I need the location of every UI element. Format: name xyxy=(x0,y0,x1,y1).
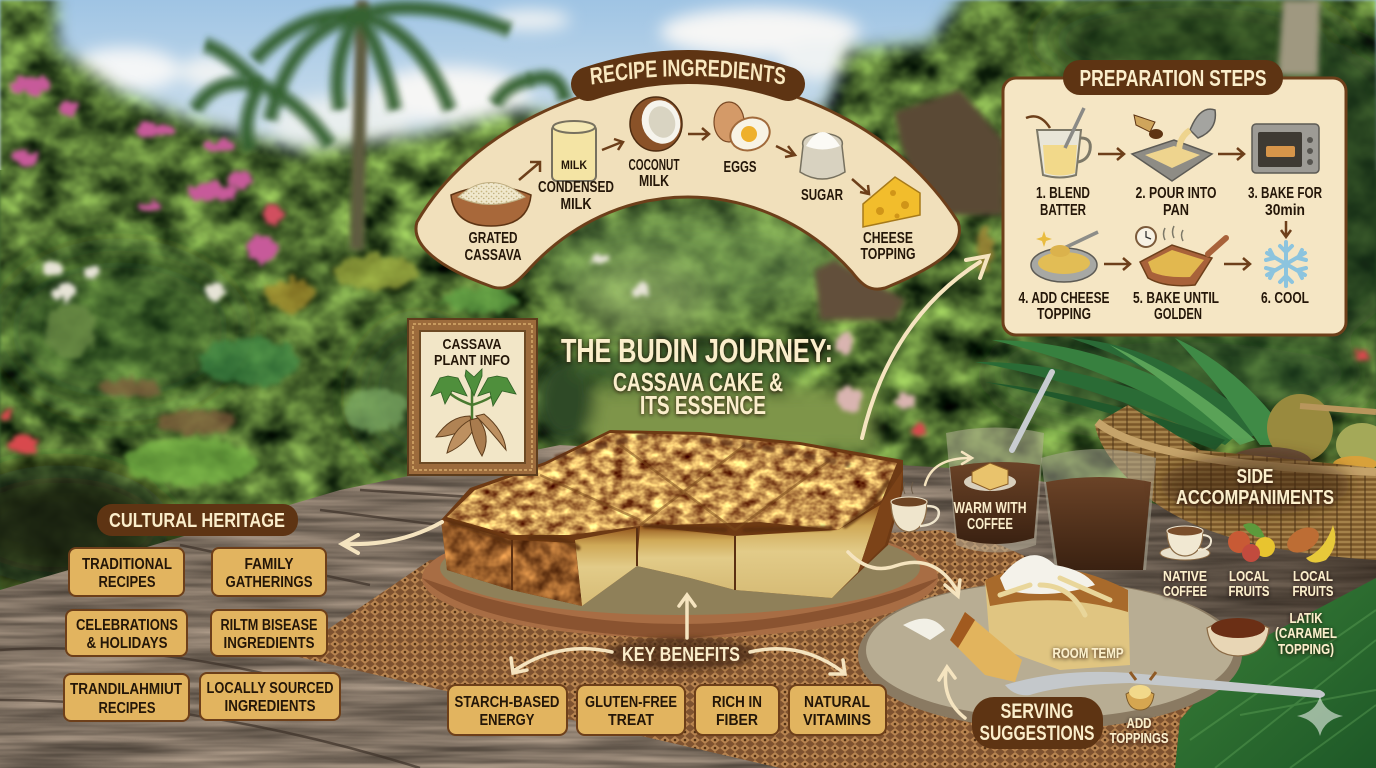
heading pill xyxy=(1063,60,1283,95)
heading: SIDE xyxy=(1236,466,1274,488)
local fruits two xyxy=(1283,522,1335,600)
ingredient: sugar: SUGAR xyxy=(801,187,843,204)
warm with coffee serving: COFFEE xyxy=(967,516,1013,533)
latik topping: TOPPING) xyxy=(1278,641,1334,658)
tag: rich disease ingredients xyxy=(211,610,327,656)
serving suggestions section xyxy=(939,667,1168,749)
arrow to slice xyxy=(939,667,965,718)
native coffee xyxy=(1160,526,1211,600)
tag: traditional recipes variant xyxy=(64,674,189,721)
panel box xyxy=(1003,78,1346,335)
tag: family gatherings: FAMILY xyxy=(244,556,294,573)
arrow xyxy=(1104,258,1130,270)
tag: locally sourced ingredients: INGREDIENTS xyxy=(224,698,316,715)
arrow xyxy=(519,162,540,180)
woven placemat xyxy=(290,530,1260,768)
main title: CASSAVA CAKE & xyxy=(613,367,783,397)
local fruits two: LOCAL xyxy=(1293,568,1333,585)
arrow xyxy=(1281,221,1291,237)
tag: rich in fiber: RICH IN xyxy=(712,694,762,711)
step 2 xyxy=(1132,109,1216,219)
step 4 xyxy=(1018,231,1110,323)
heading pill: SERVING xyxy=(1000,700,1074,723)
step 3: oven xyxy=(1248,124,1322,219)
tag: gluten-free treat xyxy=(577,685,685,735)
tag: gluten-free treat: TREAT xyxy=(608,712,654,729)
latik topping xyxy=(1207,610,1337,658)
second plate with cake slice xyxy=(858,555,1325,729)
arrow xyxy=(925,452,972,485)
latik topping: (CARAMEL xyxy=(1275,625,1337,642)
tag: traditional recipes variant: TRANDILAHMIUT xyxy=(70,681,182,698)
native coffee: NATIVE xyxy=(1163,568,1207,585)
bamboo basket with fruits xyxy=(1095,394,1376,560)
arrows from benefits heading xyxy=(511,595,845,674)
main title: ITS ESSENCE xyxy=(640,390,766,420)
step 2: PAN xyxy=(1163,202,1189,219)
local fruits one xyxy=(1228,523,1275,600)
step 3: oven: 30min xyxy=(1265,202,1305,219)
arrow: cake to serving plate xyxy=(848,552,960,596)
ingredient: grated cassava: GRATED xyxy=(468,230,518,247)
step 4: TOPPING xyxy=(1037,306,1091,323)
ingredient: grated cassava: CASSAVA xyxy=(464,247,522,264)
local fruits one: LOCAL xyxy=(1229,568,1269,585)
tag: starch-based energy: STARCH-BASED xyxy=(454,694,560,711)
icon: coffee cup xyxy=(891,482,939,532)
latik topping: LATIK xyxy=(1290,610,1323,627)
background: garden scene xyxy=(0,0,1376,590)
arrow xyxy=(776,146,795,157)
arrow xyxy=(688,128,709,140)
tag: rich disease ingredients: INGREDIENTS xyxy=(224,635,315,652)
cassava plant info frame: CASSAVA xyxy=(442,336,502,353)
tag: natural vitamins: VITAMINS xyxy=(803,712,871,729)
side accompaniments section xyxy=(1160,455,1350,658)
ingredient: cheese: TOPPING xyxy=(860,246,916,263)
step 1: 1. BLEND xyxy=(1036,185,1090,202)
room temp label: ROOM TEMP xyxy=(1052,645,1124,662)
ingredient: condensed milk: MILK xyxy=(561,158,587,172)
tag: rich disease ingredients: RILTM BISEASE xyxy=(220,617,318,634)
watermark sparkle xyxy=(1297,696,1343,736)
step 3: oven: 3. BAKE FOR xyxy=(1248,185,1322,202)
tag: starch-based energy: ENERGY xyxy=(480,712,535,729)
heading pill xyxy=(571,50,805,101)
native coffee: COFFEE xyxy=(1163,583,1207,600)
tag: celebrations and holidays xyxy=(66,610,187,656)
step 6: snowflake: 6. COOL xyxy=(1261,290,1309,307)
heading xyxy=(1160,455,1350,515)
ingredient: cheese: CHEESE xyxy=(863,230,913,247)
coffee glass left xyxy=(946,372,1052,552)
heading pill xyxy=(972,697,1103,749)
tag: traditional recipes xyxy=(69,548,184,596)
add toppings xyxy=(1110,672,1168,747)
local fruits two: FRUITS xyxy=(1292,583,1334,600)
tag: natural vitamins: NATURAL xyxy=(804,694,870,711)
arrow to heritage xyxy=(342,522,442,553)
arrow: to preparation steps xyxy=(862,256,988,438)
main plate xyxy=(422,518,938,639)
wooden table xyxy=(0,445,1376,768)
ingredient: condensed milk xyxy=(538,121,614,213)
banana leaf xyxy=(1175,578,1376,768)
tag: locally sourced ingredients xyxy=(200,673,340,720)
ingredient: cheese xyxy=(860,177,920,263)
tag: celebrations and holidays: CELEBRATIONS xyxy=(76,617,178,634)
ingredient: sugar xyxy=(800,132,845,204)
ingredient: coconut xyxy=(628,95,686,190)
add toppings: ADD xyxy=(1126,715,1152,732)
heading pill: RECIPE INGREDIENTS xyxy=(590,59,786,84)
step 6: snowflake xyxy=(1261,242,1309,307)
step 2: 2. POUR INTO xyxy=(1136,185,1216,202)
tag: celebrations and holidays: & HOLIDAYS xyxy=(86,635,168,652)
tag: family gatherings xyxy=(212,548,326,596)
ingredient: coconut: MILK xyxy=(639,173,669,190)
tag: locally sourced ingredients: LOCALLY SOURCED xyxy=(206,680,334,697)
step 4: 4. ADD CHEESE xyxy=(1018,290,1110,307)
tag: family gatherings: GATHERINGS xyxy=(226,574,313,591)
cassava plant info frame xyxy=(408,319,537,475)
arrow xyxy=(602,139,623,150)
tag: rich in fiber xyxy=(695,685,779,735)
ingredient: eggs: EGGS xyxy=(724,159,757,176)
warm with coffee serving: WARM WITH xyxy=(954,500,1026,517)
tag: traditional recipes: TRADITIONAL xyxy=(82,556,172,573)
heading pill: PREPARATION STEPS xyxy=(1080,65,1266,91)
step 1: BATTER xyxy=(1040,202,1086,219)
step 1 xyxy=(1026,108,1090,219)
tag: natural vitamins xyxy=(789,685,886,735)
step 5 xyxy=(1133,226,1226,323)
tag: traditional recipes variant: RECIPES xyxy=(98,700,156,717)
cassava cake xyxy=(441,430,903,606)
recipe ingredients panel xyxy=(414,50,961,290)
coffee glass right xyxy=(1041,449,1156,570)
local fruits one: FRUITS xyxy=(1228,583,1270,600)
ingredient: condensed milk: MILK xyxy=(560,196,592,213)
arrow xyxy=(1098,148,1124,160)
icon: cake on plate xyxy=(964,463,1016,491)
cassava plant info frame: PLANT INFO xyxy=(434,352,510,369)
tag: starch-based energy xyxy=(448,685,567,735)
ingredient: eggs xyxy=(714,102,774,176)
main title xyxy=(561,332,833,420)
arrow xyxy=(852,179,869,194)
ingredient: grated cassava xyxy=(451,182,531,264)
cultural heritage section xyxy=(64,504,442,721)
heading: ACCOMPANIMENTS xyxy=(1176,487,1334,509)
heading pill: CULTURAL HERITAGE xyxy=(109,510,285,532)
main title: THE BUDIN JOURNEY: xyxy=(561,332,833,369)
arrow xyxy=(1218,148,1244,160)
arch panel shape xyxy=(416,78,959,289)
tag: rich in fiber: FIBER xyxy=(716,712,758,729)
icon: cassava plant xyxy=(431,369,516,456)
heading pill xyxy=(97,504,298,536)
step 5: GOLDEN xyxy=(1154,306,1202,323)
step 5: 5. BAKE UNTIL xyxy=(1133,290,1219,307)
ingredient: coconut: COCONUT xyxy=(628,157,680,174)
heading: KEY BENEFITS xyxy=(622,644,740,666)
heading pill: SUGGESTIONS xyxy=(980,722,1094,745)
tag: gluten-free treat: GLUTEN-FREE xyxy=(585,694,677,711)
arrow xyxy=(1224,258,1250,270)
pandan leaves xyxy=(975,338,1295,450)
preparation steps panel xyxy=(1003,60,1346,335)
warm with coffee serving xyxy=(891,452,1026,533)
tag: traditional recipes: RECIPES xyxy=(98,574,156,591)
add toppings: TOPPINGS xyxy=(1110,730,1168,747)
ingredient: condensed milk: CONDENSED xyxy=(538,179,614,196)
heading xyxy=(606,638,756,670)
key benefits section xyxy=(448,595,886,735)
